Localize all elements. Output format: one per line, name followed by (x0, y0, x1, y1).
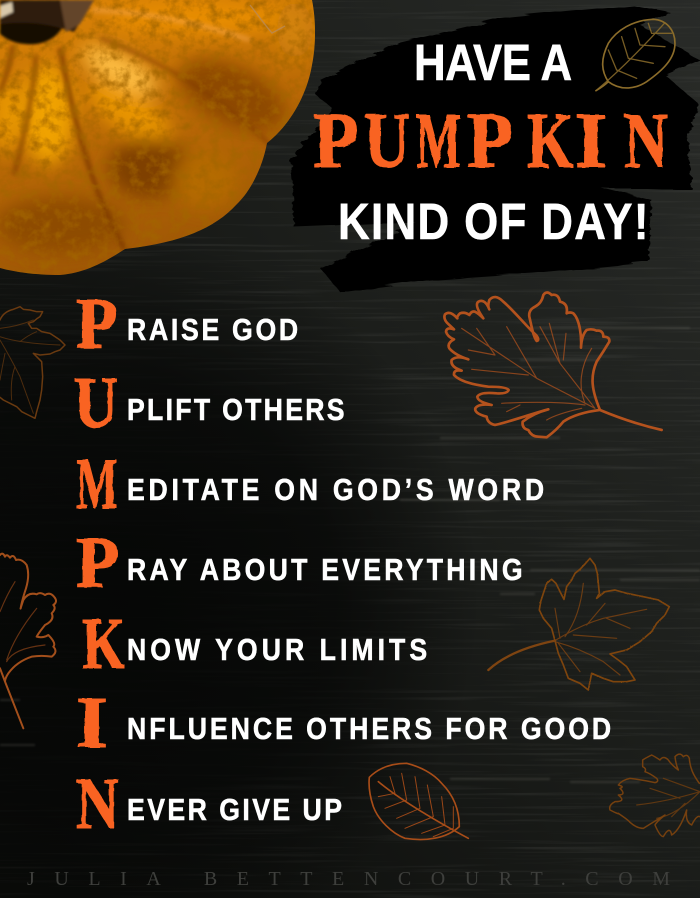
list item: pray: P (76, 522, 119, 603)
heading (313, 35, 668, 251)
list item: meditate: M (76, 443, 118, 524)
heading word: pumpkin: P (467, 98, 513, 185)
heading line: kind of day: KIND OF DAY! (338, 194, 648, 251)
pumpkin ribs (0, 10, 270, 250)
heading word: pumpkin: K (527, 98, 573, 185)
list item: influence: NFLUENCE OTHERS FOR GOOD (127, 712, 611, 747)
list item: never: EVER GIVE UP (127, 793, 342, 828)
list item: uplift others: PLIFT OTHERS (127, 393, 345, 428)
heading word: pumpkin: U (364, 98, 410, 185)
list item: influence (76, 682, 611, 763)
heading line: have a: HAVE A (414, 35, 572, 92)
mid leaf outline (539, 558, 669, 690)
large leaf veins (462, 323, 595, 420)
mid leaf veins (555, 583, 647, 675)
list item: praise god: RAISE GOD (127, 313, 298, 348)
list item: praise god (76, 283, 298, 364)
icon: gold leaf (596, 19, 675, 91)
list item: know: NOW YOUR LIMITS (127, 633, 427, 668)
icon: mid right leaf (488, 558, 669, 690)
list item: never (76, 763, 342, 844)
list item: meditate (76, 443, 544, 524)
icon: upper left dark leaf (0, 307, 65, 418)
list item: pray: RAY ABOUT EVERYTHING (127, 553, 523, 588)
list item: praise god: P (76, 283, 118, 364)
mid leaf stem (488, 641, 555, 670)
icon: bottom orange leaf (369, 763, 468, 840)
heading word: pumpkin: P (313, 98, 359, 185)
list: pumpkin acronym (74, 283, 611, 844)
list item: uplift others: U (74, 362, 118, 443)
list item: uplift others (74, 362, 345, 443)
pumpkin stem (0, 0, 94, 44)
list item: pray (76, 522, 523, 603)
pumpkin highlights (0, 2, 313, 253)
heading word: pumpkin: N (624, 98, 668, 185)
list item: know (82, 603, 427, 684)
black brush stroke (290, 5, 700, 292)
large leaf outline (444, 292, 662, 437)
list item: influence: I (76, 682, 108, 763)
icon: lower right leaf (610, 754, 700, 837)
list item: know: K (82, 603, 125, 684)
pumpkin scar (250, 5, 285, 33)
pumpkin (0, 0, 330, 290)
heading word: pumpkin: M (416, 98, 461, 185)
footer website: JULIA BETTENCOURT.COM (27, 868, 670, 890)
heading word: pumpkin: I (575, 98, 607, 185)
heading word: pumpkin (313, 98, 668, 185)
list item: meditate: EDITATE ON GOD’S WORD (127, 473, 544, 508)
icon: lower left leaf (0, 554, 56, 728)
icon: large orange leaf (444, 292, 662, 437)
list item: never: N (76, 763, 119, 844)
